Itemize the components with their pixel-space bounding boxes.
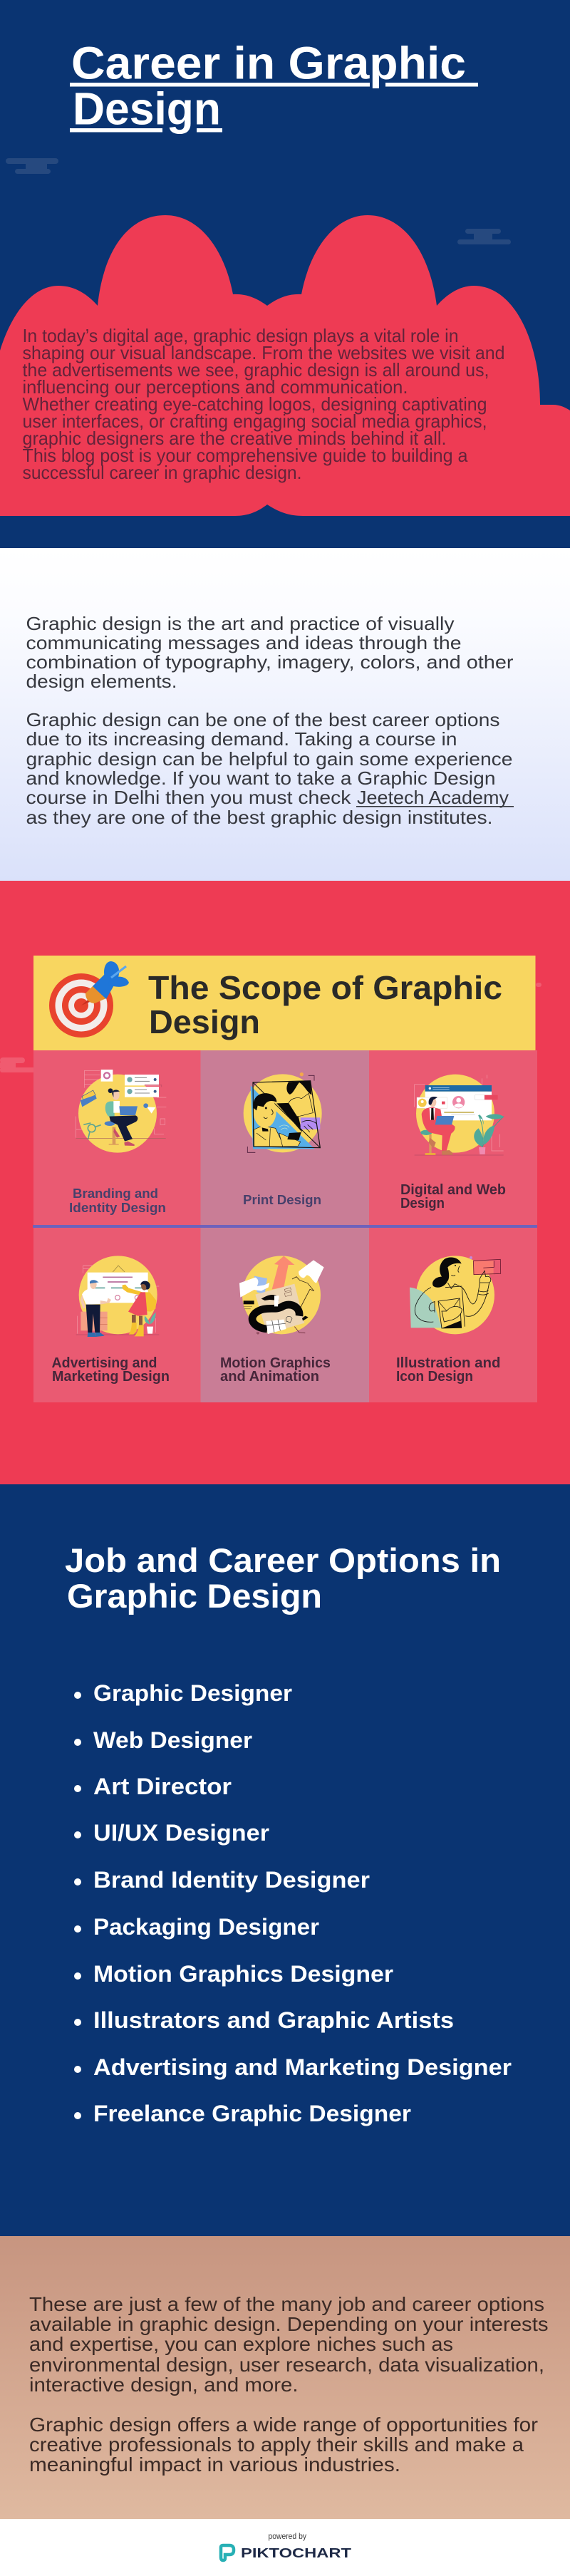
title xyxy=(70,37,478,134)
item: Brand Identity Designer xyxy=(93,1867,370,1893)
closing text two xyxy=(29,2414,538,2476)
label: digital and web design xyxy=(400,1182,506,1211)
career text: due to its increasing demand. Taking a course in xyxy=(26,728,457,750)
footer: powered by piktochart xyxy=(0,2519,570,2576)
definition text xyxy=(26,613,514,692)
panel: hero xyxy=(0,0,570,548)
career text: Graphic design can be one of the best career options xyxy=(26,709,500,730)
item: Freelance Graphic Designer xyxy=(93,2101,411,2126)
footer: powered by piktochart: PIKTOCHART xyxy=(241,2546,351,2560)
panel: job and career options xyxy=(0,1484,570,2236)
intro text: the advertisements we see, graphic design is all around us, xyxy=(23,359,489,381)
illustration: illustration and icon design xyxy=(410,1256,501,1334)
definition text: combination of typography, imagery, colors, and other xyxy=(26,651,514,673)
red cloud shape xyxy=(0,215,570,516)
labels row two xyxy=(51,1355,500,1385)
closing text one: environmental design, user research, data visualization, xyxy=(29,2354,544,2376)
panel: scope of graphic design xyxy=(0,881,570,1484)
illustration: branding and identity xyxy=(76,1070,166,1153)
intro text: In today’s digital age, graphic design plays a vital role in xyxy=(23,325,459,346)
career text: Jeetech Academy xyxy=(357,787,509,808)
labels row one xyxy=(69,1182,506,1215)
intro text: graphic designers are the creative minds behind it all. xyxy=(23,428,446,449)
item: Graphic Designer xyxy=(93,1680,292,1706)
icon: piktochart logo xyxy=(221,2545,234,2560)
definition text: communicating messages and ideas through the xyxy=(26,632,462,653)
heading: Job and Career Options in xyxy=(65,1541,501,1579)
heading text: The Scope of Graphic xyxy=(148,969,502,1006)
panel: closing xyxy=(0,2236,570,2519)
label: motion graphics and animation: and Animation xyxy=(220,1369,319,1385)
label: advertising and marketing design xyxy=(51,1355,170,1385)
heading text: Design xyxy=(149,1003,260,1040)
closing text one xyxy=(29,2293,549,2396)
item: Motion Graphics Designer xyxy=(93,1961,393,1987)
label: motion graphics and animation xyxy=(220,1355,331,1385)
label: branding and identity design: Identity Design xyxy=(69,1201,166,1215)
intro text xyxy=(23,325,504,483)
illustration: print design xyxy=(244,1072,322,1152)
label: digital and web design: Digital and Web xyxy=(400,1182,506,1198)
intro text: Whether creating eye-catching logos, designing captivating xyxy=(23,393,487,415)
closing text two: Graphic design offers a wide range of opportunities for xyxy=(29,2414,538,2436)
job list xyxy=(74,1680,512,2126)
intro text: user interfaces, or crafting engaging social media graphics, xyxy=(23,410,487,432)
definition text: Graphic design is the art and practice of visually xyxy=(26,613,455,634)
label: illustration and icon design: Icon Design xyxy=(396,1369,473,1385)
intro text: shaping our visual landscape. From the websites we visit and xyxy=(23,342,504,363)
intro text: successful career in graphic design. xyxy=(23,462,302,483)
label: motion graphics and animation: Motion Graphics xyxy=(220,1355,331,1371)
closing text one: interactive design, and more. xyxy=(29,2374,298,2396)
heading text xyxy=(148,969,502,1040)
definition text: design elements. xyxy=(26,671,177,692)
intro text: influencing our perceptions and communication. xyxy=(23,376,408,398)
icon: faint cloud right xyxy=(536,983,542,987)
item: Advertising and Marketing Designer xyxy=(93,2054,512,2080)
label: digital and web design: Design xyxy=(400,1196,445,1211)
label: advertising and marketing design: Advertising and xyxy=(51,1355,157,1371)
heading xyxy=(65,1541,501,1615)
illustration: motion graphics and animation xyxy=(239,1256,324,1334)
item: Packaging Designer xyxy=(93,1914,319,1940)
label: advertising and marketing design: Marketing Design xyxy=(52,1369,170,1385)
title: Career in Graphic xyxy=(71,37,466,88)
closing text one: These are just a few of the many job and career options xyxy=(29,2293,544,2315)
heading banner xyxy=(33,956,536,1050)
label: branding and identity design: Branding and xyxy=(73,1186,158,1201)
closing text one: available in graphic design. Depending on your interests xyxy=(29,2313,549,2335)
icon: faint cloud left xyxy=(0,1057,36,1072)
illustration: digital and web xyxy=(415,1075,504,1155)
panel: definition xyxy=(0,548,570,881)
label: illustration and icon design xyxy=(396,1355,500,1385)
closing text two: creative professionals to apply their skills and make a xyxy=(29,2433,524,2456)
illustration: advertising and marketing xyxy=(76,1256,159,1337)
item: Web Designer xyxy=(93,1727,252,1753)
heading: Graphic Design xyxy=(67,1577,322,1615)
item: UI/UX Designer xyxy=(93,1820,269,1846)
closing text one: and expertise, you can explore niches such as xyxy=(29,2333,453,2355)
career text: graphic design can be helpful to gain some experience xyxy=(26,748,512,770)
career text xyxy=(26,709,514,828)
item: Illustrators and Graphic Artists xyxy=(93,2007,454,2033)
title: Design xyxy=(73,83,221,134)
label: illustration and icon design: Illustration and xyxy=(396,1355,500,1371)
grid cells xyxy=(33,1050,537,1402)
label: branding and identity design xyxy=(69,1186,166,1215)
career text: and knowledge. If you want to take a Graphic Design xyxy=(26,767,496,789)
footer: powered by piktochart: powered by xyxy=(268,2531,306,2541)
label: print design: Print Design xyxy=(243,1193,321,1207)
icon: cloud left xyxy=(6,158,58,174)
icon: target with dart xyxy=(49,961,129,1038)
intro text: This blog post is your comprehensive guide to building a xyxy=(23,445,468,466)
item: Art Director xyxy=(93,1774,232,1799)
career text: as they are one of the best graphic design institutes. xyxy=(26,807,493,828)
closing text two: meaningful impact in various industries. xyxy=(29,2453,400,2476)
icon: cloud right xyxy=(457,229,511,244)
career text: course in Delhi then you must check xyxy=(26,787,352,808)
